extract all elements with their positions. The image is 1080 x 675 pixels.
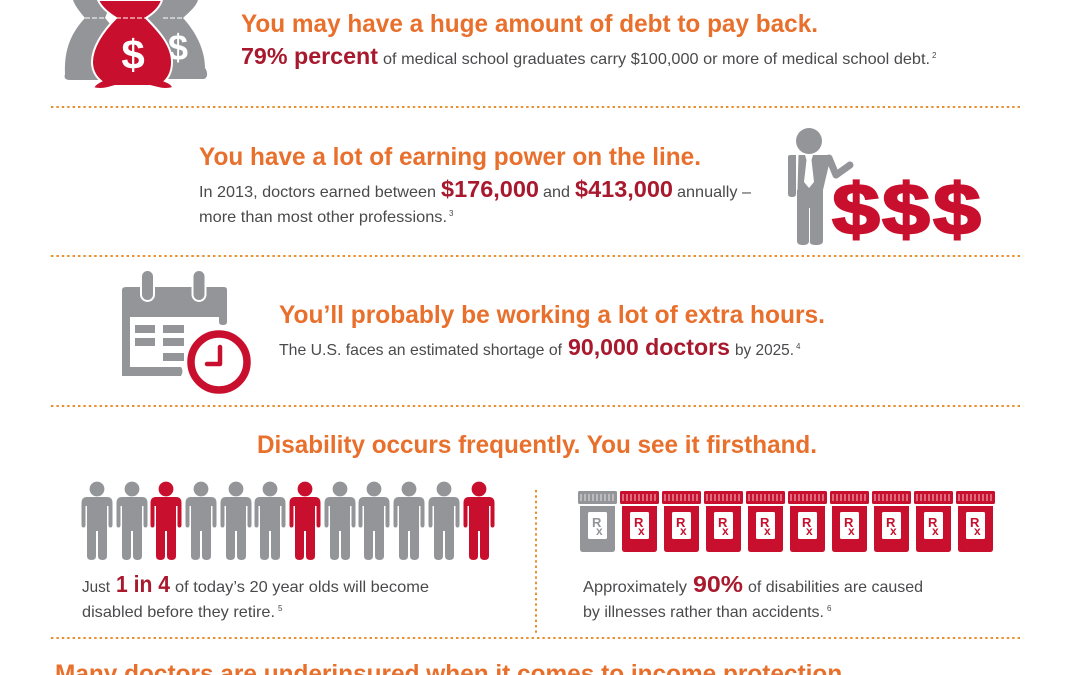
pictogram: prescription bottles: R bbox=[760, 515, 770, 530]
text: 90% statistic: 90% bbox=[693, 571, 743, 597]
pictogram: prescription bottles: x bbox=[848, 524, 855, 538]
pictogram: prescription bottles: x bbox=[764, 524, 771, 538]
pictogram: prescription bottles: R bbox=[592, 515, 602, 530]
text: earnings statistic: $413,000 bbox=[575, 176, 673, 202]
icon: businessman with dollar signs: $ bbox=[882, 170, 930, 250]
pictogram: prescription bottles: R bbox=[844, 515, 854, 530]
text: debt statistic: 79% percent bbox=[241, 43, 378, 69]
text: 90% statistic: 6 bbox=[827, 604, 832, 613]
icon: money bags: $ bbox=[121, 31, 145, 78]
text: debt statistic bbox=[241, 43, 937, 69]
pictogram: people bbox=[82, 482, 494, 560]
icon: businessman with dollar signs: $ bbox=[832, 170, 880, 250]
text: earnings statistic: more than most other professions. bbox=[199, 209, 447, 226]
text: earnings statistic bbox=[199, 176, 751, 226]
pictogram: prescription bottles: R bbox=[634, 515, 644, 530]
heading: earning power: You have a lot of earning power on the line. bbox=[199, 143, 701, 171]
pictogram: prescription bottles: x bbox=[638, 524, 645, 538]
pictogram: prescription bottles: x bbox=[974, 524, 981, 538]
pictogram: prescription bottles: R bbox=[928, 515, 938, 530]
text: earnings statistic: $176,000 bbox=[441, 176, 539, 202]
pictogram: prescription bottles: R bbox=[676, 515, 686, 530]
text: shortage statistic: 90,000 doctors bbox=[568, 334, 730, 360]
text: 90% statistic: Approximately bbox=[583, 579, 687, 596]
text: 90% statistic bbox=[583, 571, 923, 621]
text: 1 in 4 statistic: Just bbox=[82, 579, 111, 596]
text: 1 in 4 statistic bbox=[82, 571, 429, 621]
pictogram: prescription bottles bbox=[578, 491, 995, 552]
pictogram: prescription bottles: x bbox=[806, 524, 813, 538]
icon: businessman with dollar signs bbox=[788, 128, 981, 250]
icon: money bags bbox=[65, 0, 207, 89]
icon: calendar with clock bbox=[122, 270, 247, 390]
pictogram: prescription bottles: x bbox=[680, 524, 687, 538]
icon: businessman with dollar signs: $ bbox=[933, 170, 981, 250]
text: earnings statistic: In 2013, doctors earned between bbox=[199, 184, 436, 201]
text: shortage statistic: 4 bbox=[796, 342, 801, 351]
text: shortage statistic: by 2025. bbox=[735, 342, 794, 359]
text: earnings statistic: annually – bbox=[677, 184, 751, 201]
text: shortage statistic: The U.S. faces an estimated shortage of bbox=[279, 342, 563, 359]
pictogram: prescription bottles: R bbox=[802, 515, 812, 530]
text: 1 in 4 statistic: 1 in 4 bbox=[116, 571, 170, 597]
text: 90% statistic: of disabilities are caused bbox=[748, 579, 923, 596]
heading: debt: You may have a huge amount of debt to pay back. bbox=[241, 10, 818, 38]
text: 1 in 4 statistic: disabled before they retire. bbox=[82, 604, 275, 621]
pictogram: prescription bottles: x bbox=[722, 524, 729, 538]
pictogram: prescription bottles: x bbox=[890, 524, 897, 538]
text: 90% statistic: by illnesses rather than accidents. bbox=[583, 604, 824, 621]
heading: extra hours: You’ll probably be working a lot of extra hours. bbox=[279, 301, 825, 329]
pictogram: prescription bottles: x bbox=[932, 524, 939, 538]
icon: money bags: $ bbox=[168, 27, 188, 68]
text: debt statistic: of medical school graduates carry $100,000 or more of medical school debt. bbox=[383, 51, 930, 68]
pictogram: prescription bottles: x bbox=[596, 524, 603, 538]
text: earnings statistic: 3 bbox=[449, 209, 454, 218]
text: 1 in 4 statistic: 5 bbox=[278, 604, 283, 613]
text: 1 in 4 statistic: of today’s 20 year olds will become bbox=[175, 579, 429, 596]
pictogram: prescription bottles: R bbox=[718, 515, 728, 530]
text: debt statistic: 2 bbox=[932, 51, 937, 60]
heading: disability: Disability occurs frequently. You see it firsthand. bbox=[257, 431, 817, 459]
pictogram: prescription bottles: R bbox=[886, 515, 896, 530]
text: shortage statistic bbox=[279, 334, 801, 360]
text: earnings statistic: and bbox=[543, 184, 570, 201]
pictogram: prescription bottles: R bbox=[970, 515, 980, 530]
